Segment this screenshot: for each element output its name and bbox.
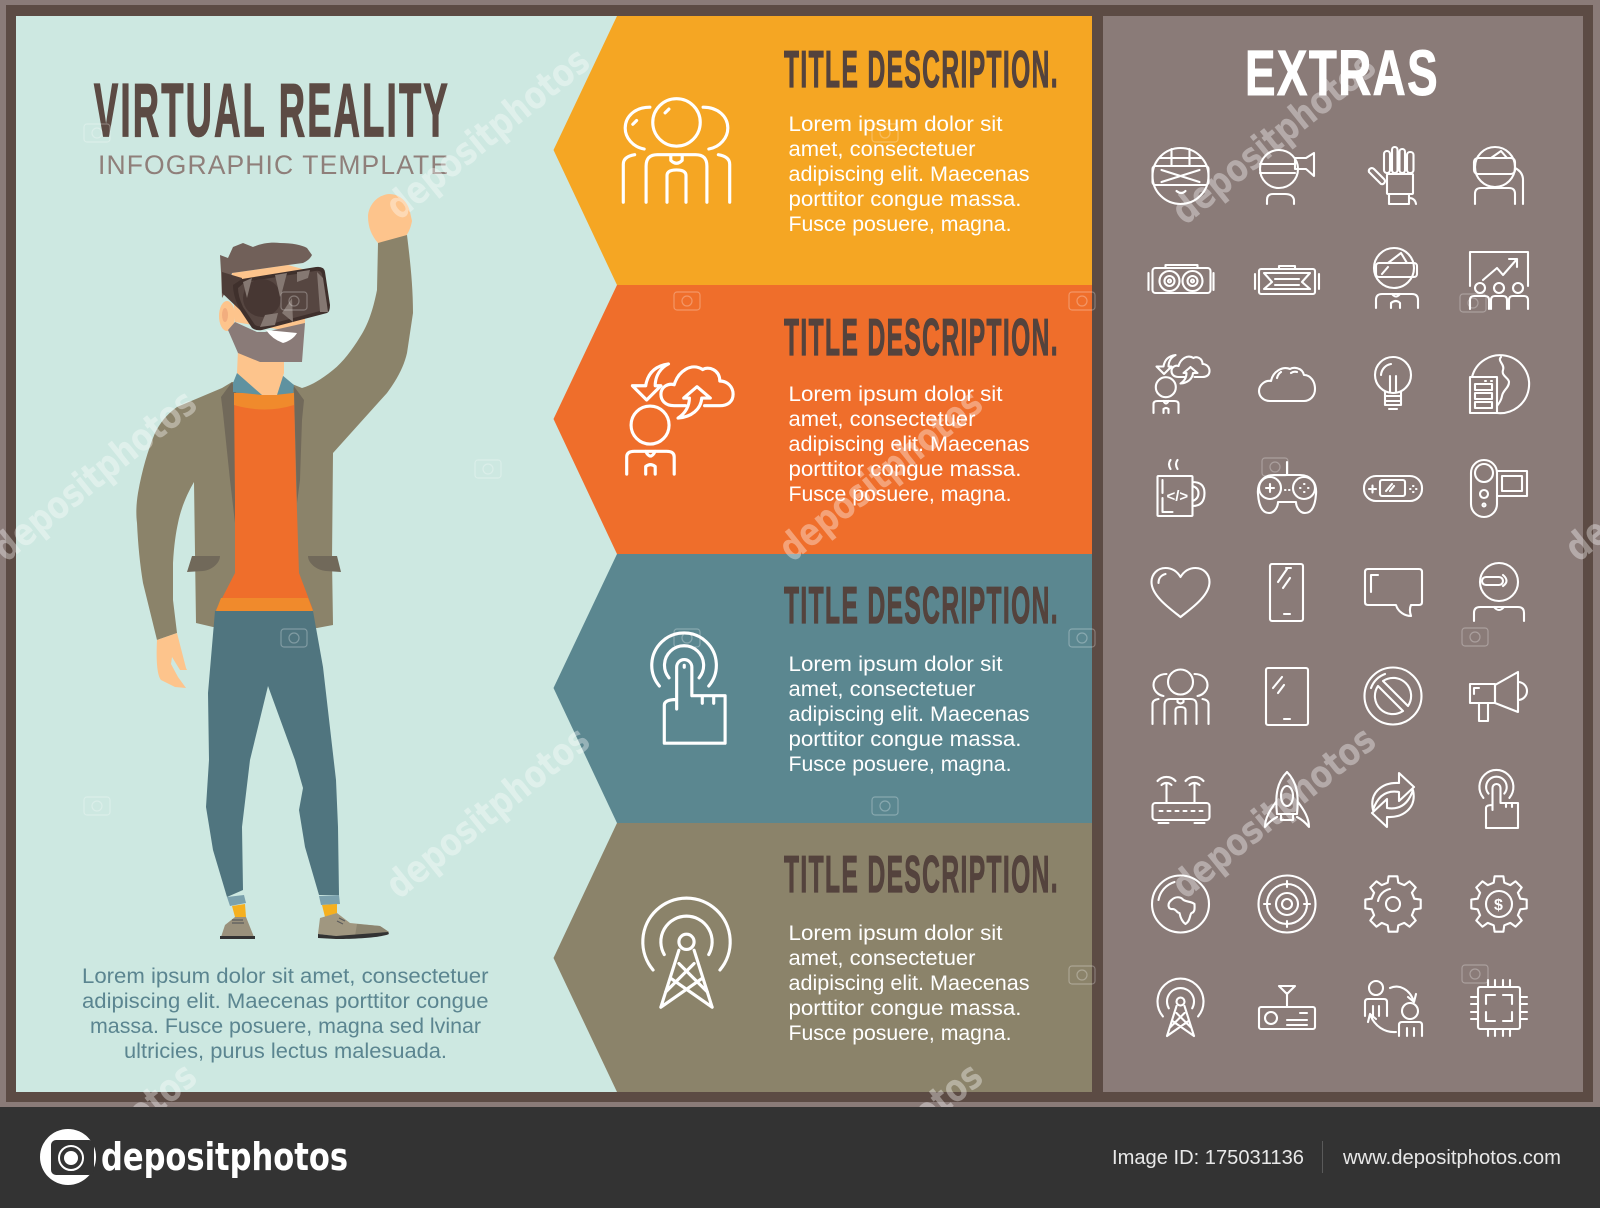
icon: globe with server xyxy=(1470,355,1529,413)
icon: projector xyxy=(1259,986,1315,1029)
icon: microchip xyxy=(1471,980,1527,1036)
sweater trim xyxy=(216,393,313,611)
panel: section 3: TITLE DESCRIPTION. xyxy=(784,577,1059,635)
panel: section 2 xyxy=(554,285,1092,554)
body text: porttitor congue massa. xyxy=(788,727,1022,751)
body text: Fusce posuere, magna. xyxy=(788,752,1012,776)
body text: porttitor congue massa. xyxy=(788,187,1022,211)
icon: touch xyxy=(652,633,725,743)
watermarks: depositphotos xyxy=(377,38,598,228)
watermarks: depositphotos xyxy=(377,717,598,907)
paragraph: Lorem ipsum dolor sit amet, consectetuer xyxy=(82,964,488,988)
body text xyxy=(788,921,1030,1045)
raised hand xyxy=(368,194,412,245)
hair xyxy=(220,243,312,298)
body text: adipiscing elit. Maecenas xyxy=(788,162,1030,186)
trousers xyxy=(206,611,339,897)
icon: VR glove xyxy=(1369,147,1416,204)
paragraph: massa. Fusce posuere, magna sed lvinar xyxy=(90,1014,481,1038)
icon grid: extras xyxy=(1148,147,1529,1036)
website: www.depositphotos.com xyxy=(1342,1147,1561,1169)
body text xyxy=(788,112,1030,236)
chevron xyxy=(554,285,1092,554)
trouser cuffs xyxy=(227,895,340,906)
body text: adipiscing elit. Maecenas xyxy=(788,971,1030,995)
watermarks: depositphotos xyxy=(770,380,991,570)
panel: section 4 xyxy=(554,823,1092,1092)
icon: wifi router xyxy=(1152,777,1210,823)
icon: megaphone xyxy=(1470,672,1527,721)
panel: section 1: TITLE DESCRIPTION. xyxy=(784,41,1059,99)
icon: money gear xyxy=(1471,876,1527,932)
icon: light bulb xyxy=(1375,357,1411,409)
icon: person with cloud xyxy=(627,364,733,474)
body text: amet, consectetuer xyxy=(788,137,976,161)
panel: right extras background xyxy=(1103,16,1583,1092)
icon: money gear: $ xyxy=(1494,897,1503,914)
paragraph: ultricies, purus lectus malesuada. xyxy=(124,1039,447,1063)
VR headset xyxy=(222,267,330,330)
chevron xyxy=(554,554,1092,823)
body text: Fusce posuere, magna. xyxy=(788,482,1012,506)
logo mark xyxy=(40,1129,96,1185)
icon: goggles back xyxy=(1255,266,1319,294)
icon: person with cloud xyxy=(1154,355,1210,413)
icon: gamepad xyxy=(1258,462,1316,513)
body text: amet, consectetuer xyxy=(788,946,976,970)
icon: prohibited sign xyxy=(1364,668,1422,724)
jacket pockets xyxy=(187,556,341,572)
beard xyxy=(228,322,305,362)
jacket lapels xyxy=(221,382,304,523)
icon: heart xyxy=(1152,568,1210,617)
icon: handheld console xyxy=(1364,476,1422,501)
ear xyxy=(219,301,235,331)
icon: speech bubble xyxy=(1365,569,1422,616)
icon: people exchange xyxy=(1365,981,1422,1036)
icon: person in headset xyxy=(1374,248,1418,308)
paragraph: adipiscing elit. Maecenas porttitor congue xyxy=(82,989,488,1013)
icon: VR headset front xyxy=(1152,148,1208,204)
logo wordmark: depositphotos xyxy=(101,1135,348,1179)
socks xyxy=(232,904,337,917)
shoes xyxy=(220,913,389,939)
icon: gear xyxy=(1365,876,1421,932)
sweater xyxy=(216,393,313,610)
jacket xyxy=(136,235,413,640)
neck xyxy=(237,350,284,395)
icon: globe xyxy=(1152,876,1209,932)
body text: Fusce posuere, magna. xyxy=(788,212,1012,236)
shirt collar xyxy=(233,373,294,395)
panel: section 2: TITLE DESCRIPTION. xyxy=(784,309,1059,367)
subtitle: INFOGRAPHIC TEMPLATE xyxy=(98,150,448,180)
icon: people group xyxy=(623,99,730,202)
body text: adipiscing elit. Maecenas xyxy=(788,432,1030,456)
body text: Lorem ipsum dolor sit xyxy=(788,921,1003,945)
watermark camera marks xyxy=(84,124,1488,984)
icon: camcorder xyxy=(1471,460,1527,517)
body text: amet, consectetuer xyxy=(788,677,976,701)
icon: people group xyxy=(1152,670,1208,724)
body text: adipiscing elit. Maecenas xyxy=(788,702,1030,726)
body text: Lorem ipsum dolor sit xyxy=(788,382,1003,406)
icon: goggles front xyxy=(1148,265,1214,293)
image id: Image ID: 175031136 xyxy=(1112,1147,1304,1169)
icon: head with VR camera xyxy=(1260,150,1314,204)
chevron xyxy=(554,823,1092,1092)
icon: person with side goggles xyxy=(1474,563,1524,621)
icon: tablet xyxy=(1266,668,1308,725)
text: VIRTUAL REALITY xyxy=(94,68,450,152)
panel: section 1 xyxy=(554,16,1092,285)
icon: person with headset cable xyxy=(1474,147,1523,204)
body text: Fusce posuere, magna. xyxy=(788,1021,1012,1045)
icon: smartphone xyxy=(1270,564,1303,621)
icon: code mug: </> xyxy=(1166,488,1188,505)
extras heading: EXTRAS xyxy=(1245,37,1439,109)
watermarks: depositphotos xyxy=(1163,43,1384,233)
icon: code mug xyxy=(1158,460,1204,516)
icon: rocket xyxy=(1265,772,1309,827)
icon: cloud xyxy=(1259,368,1315,401)
panel: section 3 xyxy=(554,554,1092,823)
body text: Lorem ipsum dolor sit xyxy=(788,652,1003,676)
body text: porttitor congue massa. xyxy=(788,457,1022,481)
illustration: man wearing VR headset xyxy=(136,194,413,939)
lower hand xyxy=(157,633,187,688)
icon: signal tower xyxy=(1158,979,1204,1036)
chevron xyxy=(554,16,1092,285)
body text: porttitor congue massa. xyxy=(788,996,1022,1020)
panel: left background xyxy=(16,16,1092,1092)
icon: touch xyxy=(1479,770,1518,828)
body text: amet, consectetuer xyxy=(788,407,976,431)
body text xyxy=(788,652,1030,776)
body text xyxy=(788,382,1030,506)
icon: target xyxy=(1258,876,1316,932)
footer bar xyxy=(0,1107,1600,1208)
icon: refresh arrows xyxy=(1372,773,1414,827)
body text: Lorem ipsum dolor sit xyxy=(788,112,1003,136)
icon: signal tower xyxy=(643,898,730,1007)
paragraph xyxy=(82,964,488,1063)
panel: section 4: TITLE DESCRIPTION. xyxy=(784,846,1059,904)
icon: presentation chart xyxy=(1470,252,1528,309)
face xyxy=(232,265,306,330)
watermarks: depositphotos xyxy=(1163,717,1384,907)
smile xyxy=(266,330,297,343)
